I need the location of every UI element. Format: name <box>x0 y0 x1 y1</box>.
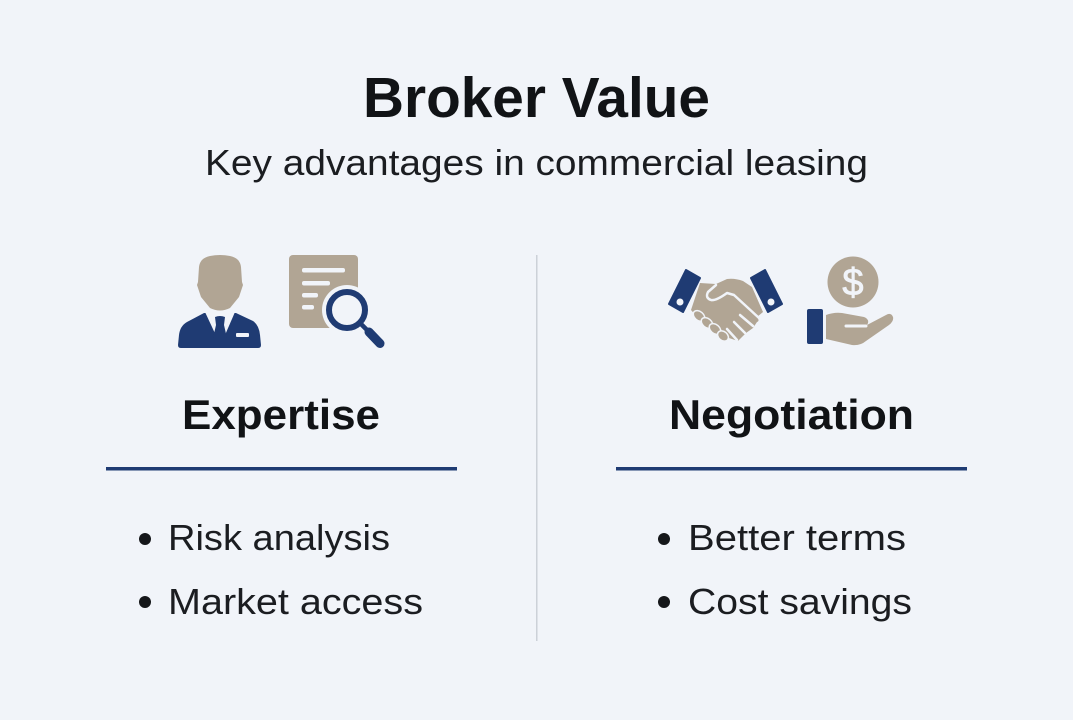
list: expertise points: Market access <box>168 581 423 622</box>
subtitle: Key advantages in commercial leasing <box>205 142 868 183</box>
panel: negotiation <box>616 256 967 622</box>
icon: document with magnifier <box>289 255 380 344</box>
panel: expertise <box>106 255 457 622</box>
list: negotiation points: Cost savings <box>688 581 912 622</box>
list: expertise points <box>139 517 423 622</box>
heading: expertise: Expertise <box>182 391 380 438</box>
icon: hand with dollar coin: $ <box>842 262 864 304</box>
heading: negotiation: Negotiation <box>669 391 914 438</box>
icon: hand with dollar coin <box>807 256 893 345</box>
title: Broker Value <box>363 66 710 130</box>
list: expertise points: Risk analysis <box>168 517 390 558</box>
list: negotiation points <box>658 517 912 622</box>
icon: handshake <box>669 270 782 343</box>
icon: businessman <box>178 255 261 348</box>
list: negotiation points: Better terms <box>688 517 906 558</box>
